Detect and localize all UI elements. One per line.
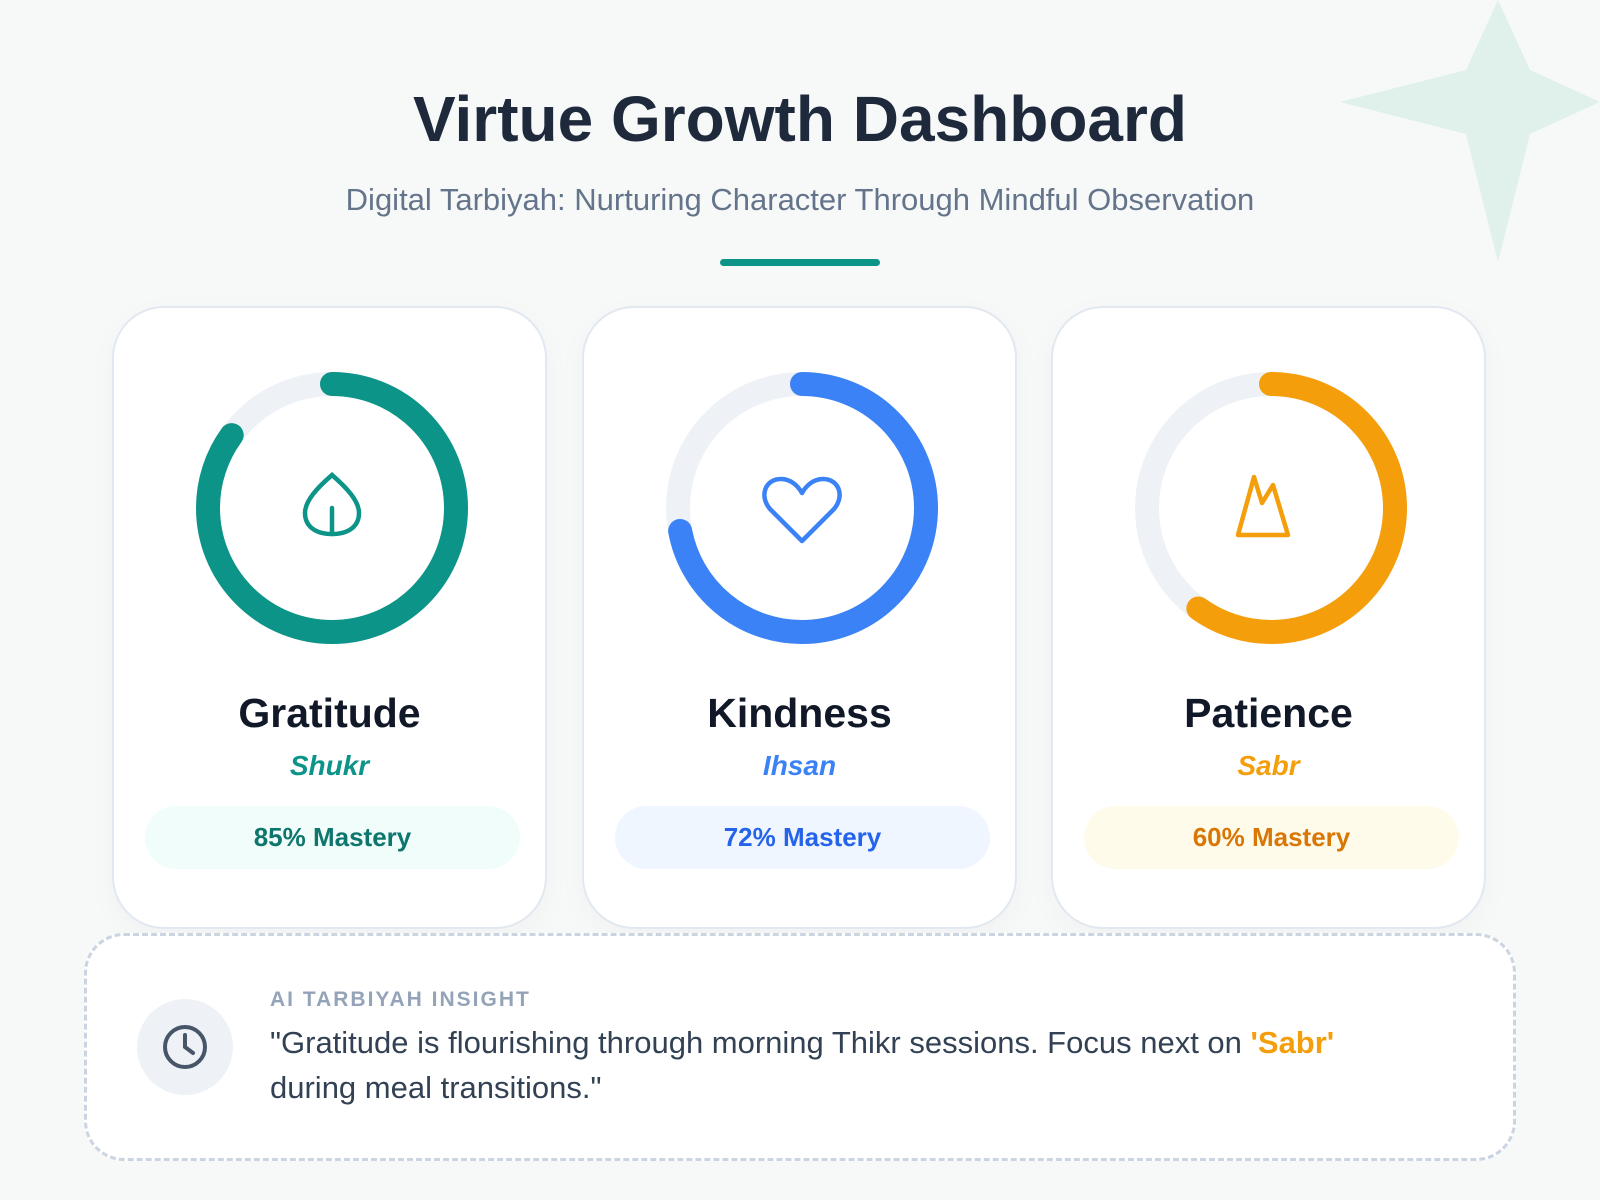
ring: gratitude 85%: [196, 372, 468, 644]
pill: 72%: [615, 806, 990, 869]
pill: 60%: 60% Mastery: [1193, 822, 1350, 852]
ring: kindness 72%: [666, 372, 938, 644]
card: gratitude: [112, 306, 547, 929]
icon: mountain: [1238, 477, 1288, 535]
label: Shukr: Shukr: [290, 750, 369, 781]
icon: clock: [137, 999, 233, 1095]
label: Kindness: Kindness: [707, 690, 892, 736]
label: Ihsan: Ihsan: [763, 750, 836, 781]
label: Patience: Patience: [1184, 690, 1353, 736]
decorative star: [1340, 0, 1600, 262]
icon: heart: [764, 479, 840, 541]
label: Gratitude: Gratitude: [238, 690, 421, 736]
pill: 85%: 85% Mastery: [254, 822, 411, 852]
label: Sabr: Sabr: [1237, 750, 1300, 781]
card: patience: [1051, 306, 1486, 929]
ring: patience 60%: [1135, 372, 1407, 644]
insight quote: "Gratitude is flourishing through morning Thikr sessions. Focus next on 'Sabr' during meal transitions.": [270, 1025, 1334, 1105]
panel: AI insight: [84, 933, 1516, 1161]
title: Virtue Growth Dashboard: [413, 83, 1187, 155]
pill: 72%: 72% Mastery: [724, 822, 881, 852]
card: kindness: [582, 306, 1017, 929]
insight label: AI TARBIYAH INSIGHT: [270, 988, 531, 1011]
pill: 85%: [145, 806, 520, 869]
pill: 60%: [1084, 806, 1459, 869]
accent underline: [720, 259, 880, 266]
icon: leaf: [305, 475, 359, 534]
subtitle: Digital Tarbiyah: Nurturing Character Through Mindful Observation: [346, 182, 1254, 217]
